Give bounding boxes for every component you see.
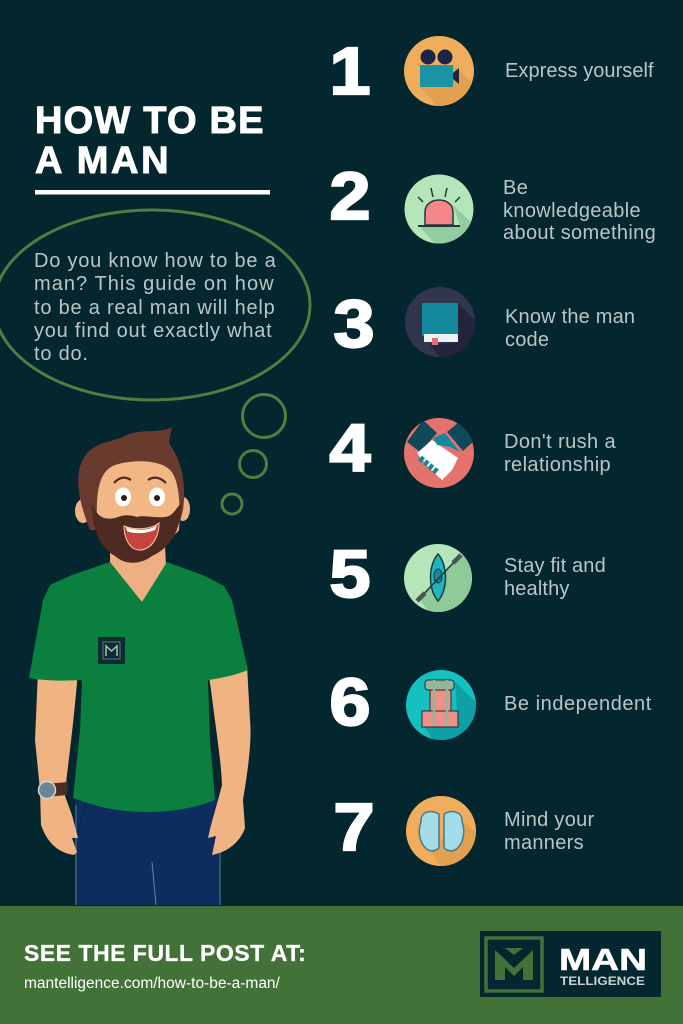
step 5 text: healthy <box>504 578 570 600</box>
intro text: man? This guide on how <box>34 273 275 295</box>
step 3 text: Know the man <box>505 306 635 328</box>
title <box>35 100 265 182</box>
thought bubble <box>0 210 310 514</box>
icon 6: backpack <box>406 670 476 740</box>
intro text: to do. <box>34 343 89 365</box>
number 1: 1 <box>329 34 370 109</box>
title: A MAN <box>35 140 171 182</box>
watch <box>38 782 68 798</box>
step 7 text: manners <box>504 832 584 854</box>
shirt <box>29 562 248 812</box>
title: HOW TO BE <box>35 100 265 142</box>
icon 5: kayak <box>404 544 472 612</box>
step 2 text: about something <box>503 222 656 244</box>
step 3 text <box>505 306 635 350</box>
neck <box>110 545 166 602</box>
intro text <box>34 250 277 365</box>
intro text: you find out exactly what <box>34 320 273 342</box>
footer url: mantelligence.com/how-to-be-a-man/ <box>24 975 280 992</box>
icon 2: siren <box>404 174 474 244</box>
logo: TELLIGENCE <box>560 974 645 988</box>
intro text: Do you know how to be a <box>34 250 277 272</box>
icon 3: book <box>405 287 475 357</box>
number 7: 7 <box>333 790 374 865</box>
intro text: to be a real man will help <box>34 297 276 319</box>
beard <box>92 503 181 563</box>
left arm <box>35 670 78 855</box>
step 3 text: code <box>505 328 549 350</box>
step 5 text <box>504 555 606 600</box>
icon 1: film camera <box>404 36 474 106</box>
step 4 text: Don't rush a <box>504 431 616 453</box>
man character <box>29 427 251 905</box>
number 4: 4 <box>329 411 370 486</box>
eyes <box>115 488 131 506</box>
footer band <box>0 906 683 1024</box>
step 5 text: Stay fit and <box>504 555 606 577</box>
number 2: 2 <box>329 159 370 234</box>
number 3: 3 <box>333 287 374 362</box>
step 4 text: relationship <box>504 454 611 476</box>
step 6 text: Be independent <box>504 693 652 715</box>
right arm <box>208 665 251 855</box>
face <box>97 461 180 541</box>
logo: MAN <box>559 942 647 977</box>
step 1 text: Express yourself <box>505 60 654 82</box>
ears <box>75 499 91 523</box>
step 2 text: knowledgeable <box>503 200 641 222</box>
icon 4: handshake <box>404 418 475 488</box>
icon 7: brain <box>406 796 476 866</box>
number 6: 6 <box>329 665 370 740</box>
step 2 text: Be <box>503 177 528 199</box>
footer heading: SEE THE FULL POST AT: <box>24 940 306 966</box>
step 7 text: Mind your <box>504 809 595 831</box>
mouth <box>124 523 159 550</box>
logo <box>480 931 661 997</box>
hair <box>78 427 184 530</box>
step 7 text <box>504 809 595 854</box>
number 5: 5 <box>329 537 370 612</box>
step 2 text <box>503 177 656 244</box>
step 4 text <box>504 431 616 476</box>
